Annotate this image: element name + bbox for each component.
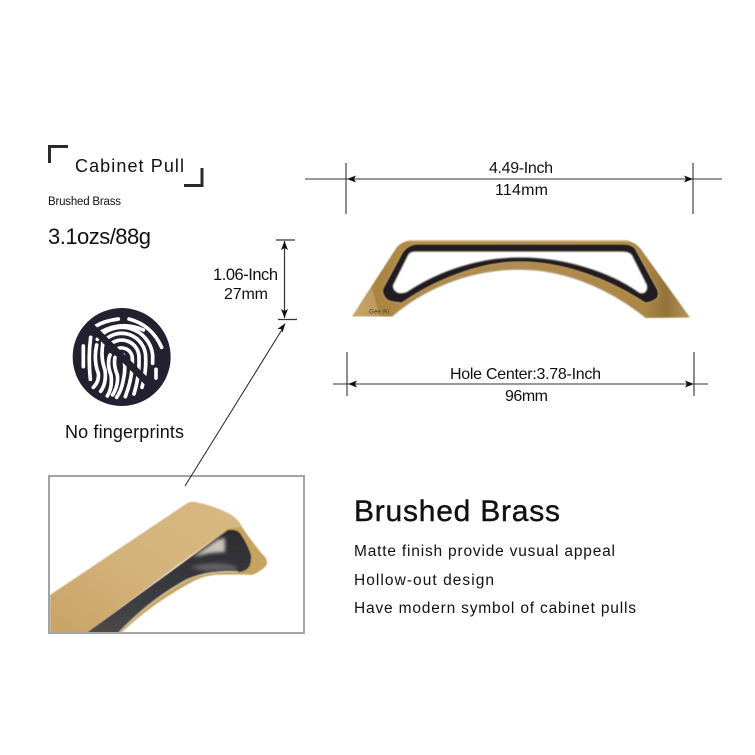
dimension: height: 27mm	[224, 286, 268, 303]
weight: 3.1ozs/88g	[48, 224, 151, 249]
icon: no fingerprints	[73, 308, 171, 406]
caption: no fingerprints: No fingerprints	[65, 422, 184, 442]
feature text: symbol: Have modern symbol of cabinet pulls	[354, 600, 636, 617]
dimension: height	[213, 240, 297, 320]
dimension: hole center: Hole Center:3.78-Inch	[450, 366, 601, 383]
heading: Brushed Brass: Brushed Brass	[354, 495, 560, 528]
leader arrow to detail photo	[185, 323, 286, 486]
subtitle: finish: Brushed Brass	[48, 196, 121, 208]
title: Cabinet Pull: Cabinet Pull	[75, 156, 184, 176]
dimension: overall length	[305, 160, 722, 214]
dimension: overall length: 4.49-Inch	[489, 160, 553, 177]
feature text: design: Hollow-out design	[354, 572, 494, 589]
photo: brass top face	[50, 502, 242, 634]
feature text: finish: Matte finish provide vusual appeal	[354, 543, 615, 560]
corner bracket: top left	[50, 146, 68, 163]
photo: brass end underside	[120, 526, 268, 632]
dimension: hole center	[333, 352, 708, 405]
product: brass handle front view	[352, 240, 690, 318]
corner bracket: bottom right	[184, 168, 202, 186]
logo mark on handle: Gee·Ri	[369, 310, 389, 316]
dimension: height: 1.06-Inch	[213, 266, 278, 284]
dimension: hole center: 96mm	[505, 388, 548, 405]
panel: detail photo	[49, 476, 304, 634]
dimension: overall length: 114mm	[495, 182, 548, 199]
